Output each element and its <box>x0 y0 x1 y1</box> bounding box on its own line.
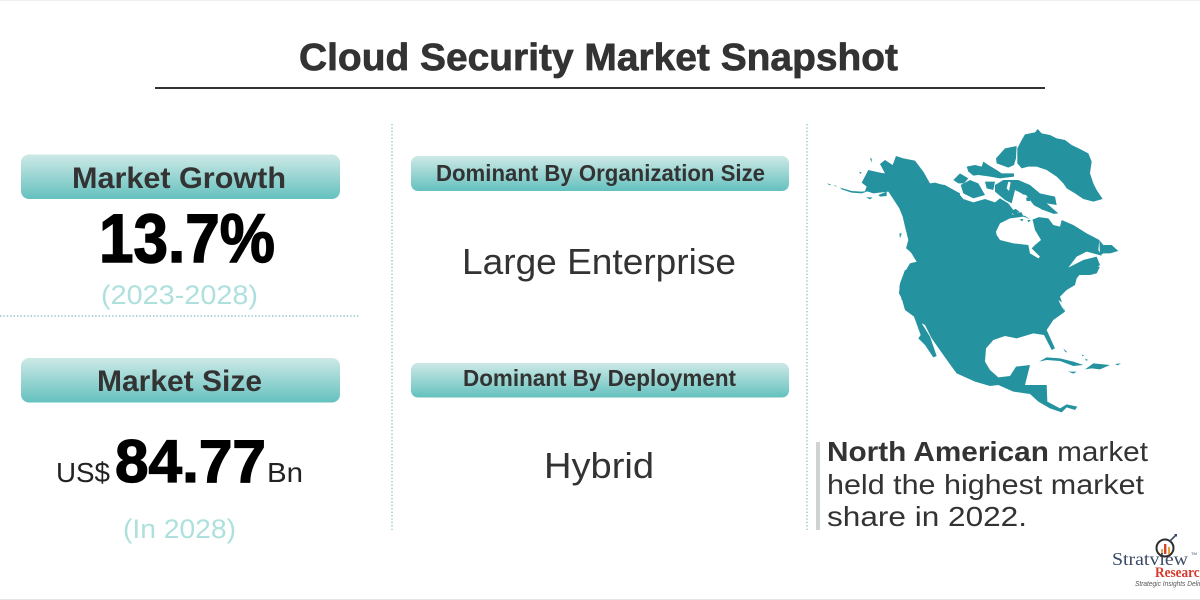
size value: 84.77 <box>115 428 266 495</box>
heading: organization size: Dominant By Organization Size <box>436 160 765 186</box>
growth period: (2023-2028) <box>101 280 258 310</box>
callout: north american market: share in 2022. <box>827 501 1027 532</box>
title: Cloud Security Market Snapshot <box>299 37 898 79</box>
value: hybrid: Hybrid <box>544 445 654 486</box>
size year: (In 2028) <box>123 514 236 544</box>
logo: stratview research <box>1112 534 1200 588</box>
size value <box>56 428 303 495</box>
heading: market growth: Market Growth <box>72 162 286 195</box>
callout: north american market: held the highest market <box>827 469 1144 500</box>
map: north america <box>827 129 1121 412</box>
icon: magnifier <box>1156 534 1177 556</box>
heading: organization size <box>411 156 789 191</box>
panel: dominant by deployment <box>411 363 789 486</box>
callout: north american market <box>816 436 1148 532</box>
logo: stratview research: Stratview <box>1112 549 1188 569</box>
heading: market size <box>21 358 340 402</box>
logo: stratview research: TM <box>1191 551 1197 556</box>
panel: market size <box>21 358 340 544</box>
heading: deployment <box>411 363 789 398</box>
size value: Bn <box>267 457 303 488</box>
growth value: 13.7% <box>99 200 275 277</box>
heading: market growth <box>21 154 340 199</box>
heading: deployment: Dominant By Deployment <box>463 365 736 391</box>
panel: dominant by organization size <box>411 156 789 282</box>
value: large enterprise: Large Enterprise <box>462 241 736 282</box>
size value: US$ <box>56 457 110 488</box>
panel: market growth <box>21 154 340 310</box>
heading: market size: Market Size <box>97 365 262 398</box>
callout: north american market: North American market <box>827 436 1148 467</box>
